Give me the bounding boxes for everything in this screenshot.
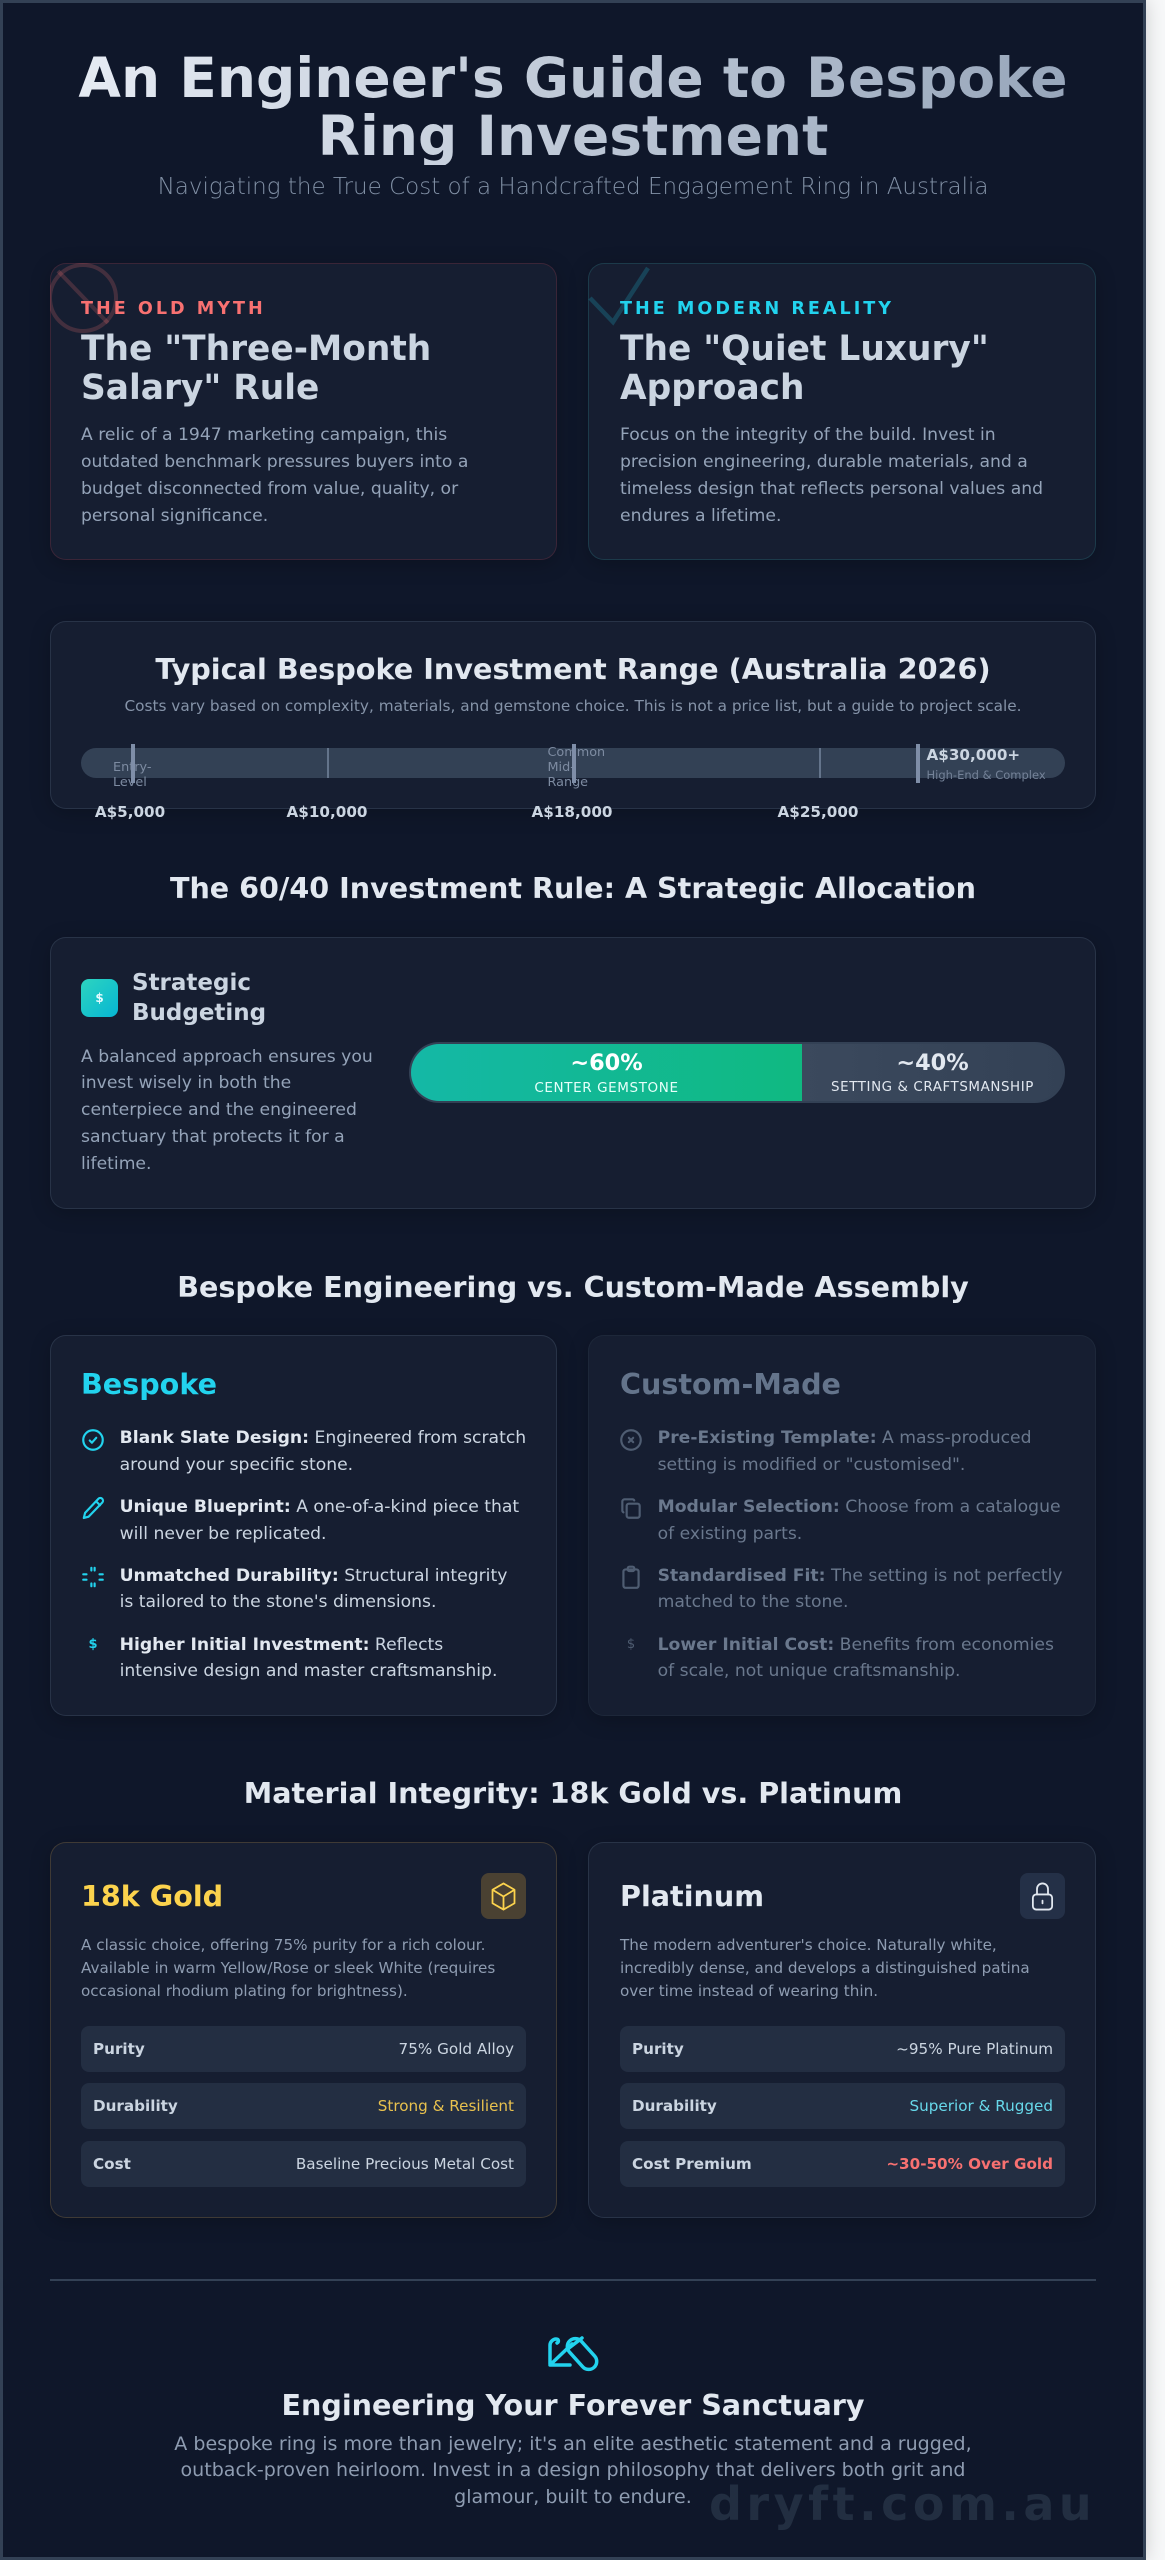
footer text: A bespoke ring is more than jewelry; it's an elite aesthetic statement and a rugged, bbox=[174, 2432, 972, 2454]
title: An Engineer's Guide to Bespoke bbox=[78, 46, 1068, 110]
value: ~60% bbox=[570, 1050, 643, 1076]
row: durability: Strong & Resilient bbox=[378, 2097, 514, 2115]
icon: padlock bbox=[1020, 1873, 1064, 1919]
icon: x circle bbox=[620, 1429, 642, 1451]
row: durability: Durability bbox=[93, 2097, 178, 2115]
heading bbox=[132, 970, 266, 1026]
item: cost: Lower Initial Cost: Benefits from economies bbox=[658, 1634, 1054, 1654]
row: cost bbox=[81, 2140, 526, 2186]
label: entry level bbox=[113, 760, 151, 790]
marker: 10k bbox=[327, 748, 329, 778]
body text: outdated benchmark pressures buyers into a bbox=[81, 452, 468, 472]
body text: A balanced approach ensures you bbox=[81, 1047, 373, 1067]
item: fit: Standardised Fit: The setting is not perfectly bbox=[658, 1566, 1063, 1586]
heading: material integrity: Material Integrity: 18k Gold vs. Platinum bbox=[244, 1776, 902, 1810]
item: durability bbox=[120, 1566, 507, 1612]
item: blank slate: around your specific stone. bbox=[120, 1455, 353, 1475]
row: durability bbox=[81, 2083, 526, 2129]
body text: budget disconnected from value, quality, or bbox=[81, 479, 458, 499]
heading: The "Quiet Luxury" bbox=[620, 328, 989, 368]
icon: prohibited sign bbox=[50, 263, 118, 333]
item: template: setting is modified or "customised". bbox=[658, 1455, 965, 1475]
item: modular bbox=[658, 1497, 1061, 1544]
heading: Platinum bbox=[620, 1878, 764, 1912]
label: THE MODERN REALITY bbox=[620, 299, 894, 319]
item: investment: intensive design and master craftsmanship. bbox=[120, 1661, 497, 1681]
icon: dollar badge: $ bbox=[95, 991, 104, 1005]
heading: Bespoke bbox=[81, 1366, 217, 1400]
body text bbox=[81, 425, 468, 526]
body text: timeless design that reflects personal values and bbox=[620, 479, 1043, 499]
marker: 30k bbox=[916, 744, 920, 783]
subtitle: Navigating the True Cost of a Handcrafted Engagement Ring in Australia bbox=[158, 174, 988, 200]
item: durability: is tailored to the stone's dimensions. bbox=[120, 1592, 436, 1612]
row: cost premium bbox=[620, 2140, 1065, 2186]
item: template bbox=[658, 1428, 1032, 1475]
panel: strategic budgeting bbox=[50, 937, 1096, 1209]
row: purity: ~95% Pure Platinum bbox=[896, 2040, 1053, 2058]
item: investment bbox=[120, 1634, 497, 1681]
heading: Strategic bbox=[132, 970, 251, 996]
icon: copy bbox=[621, 1498, 641, 1519]
footer text: glamour, built to endure. bbox=[454, 2486, 692, 2508]
row: purity bbox=[81, 2026, 526, 2072]
label: top tier price: A$30,000+ bbox=[926, 746, 1020, 764]
item: unique blueprint bbox=[120, 1497, 519, 1544]
title: Ring Investment bbox=[318, 104, 828, 168]
item: cost: of scale, not unique craftsmanship. bbox=[658, 1661, 961, 1681]
icon: cube bbox=[480, 1873, 526, 1919]
icon: pencil bbox=[82, 1496, 104, 1520]
panel: 18k gold bbox=[50, 1842, 557, 2218]
panel: platinum bbox=[588, 1842, 1096, 2218]
item: unique blueprint: Unique Blueprint: A one-of-a-kind piece that bbox=[120, 1497, 519, 1517]
row: purity: 75% Gold Alloy bbox=[399, 2040, 514, 2058]
row: durability: Durability bbox=[632, 2097, 717, 2115]
body text: endures a lifetime. bbox=[620, 506, 781, 526]
icon: dashed ring bbox=[82, 1566, 104, 1588]
heading: bespoke vs custom: Bespoke Engineering vs. Custom-Made Assembly bbox=[177, 1270, 969, 1304]
footer text: outback-proven heirloom. Invest in a design philosophy that delivers both grit and bbox=[181, 2459, 965, 2481]
body text: centerpiece and the engineered bbox=[81, 1100, 357, 1120]
item: template: Pre-Existing Template: A mass-produced bbox=[658, 1428, 1032, 1448]
marker: 25k bbox=[819, 748, 821, 778]
icon: check mark bbox=[588, 266, 650, 326]
row: purity: Purity bbox=[93, 2040, 145, 2058]
item: durability: Unmatched Durability: Structural integrity bbox=[120, 1566, 507, 1586]
panel: custom made bbox=[588, 1335, 1096, 1716]
label: common mid range: Common bbox=[548, 744, 605, 760]
label: common mid range: Mid- bbox=[548, 760, 575, 774]
row: purity: Purity bbox=[632, 2040, 684, 2058]
icon: check circle bbox=[82, 1429, 104, 1451]
description: occasional rhodium plating for brightness). bbox=[81, 1982, 408, 2000]
description: over time instead of wearing thin. bbox=[620, 1982, 878, 2000]
row: durability bbox=[620, 2083, 1065, 2129]
segment: setting and craftsmanship 40% bbox=[831, 1050, 1034, 1095]
label: SETTING & CRAFTSMANSHIP bbox=[831, 1080, 1034, 1095]
description: Available in warm Yellow/Rose or sleek White (requires bbox=[81, 1958, 495, 1976]
panel: the old myth bbox=[50, 263, 557, 560]
panel: bespoke bbox=[50, 1335, 557, 1716]
label: high end: High-End & Complex bbox=[926, 768, 1046, 782]
segment: center gemstone 60% bbox=[411, 1044, 802, 1101]
panel: the modern reality bbox=[588, 263, 1096, 560]
item: modular: of existing parts. bbox=[658, 1524, 802, 1544]
row: cost: Baseline Precious Metal Cost bbox=[296, 2154, 514, 2172]
body text: precision engineering, durable materials, and a bbox=[620, 452, 1028, 472]
item: fit: matched to the stone. bbox=[658, 1592, 848, 1612]
label: entry level: Level bbox=[113, 774, 147, 790]
description bbox=[81, 1936, 495, 2000]
footer text bbox=[174, 2432, 972, 2508]
description: incredibly dense, and develops a distinguished patina bbox=[620, 1958, 1030, 1976]
heading: Custom-Made bbox=[620, 1366, 841, 1400]
footer heading: Engineering Your Forever Sanctuary bbox=[282, 2388, 864, 2422]
body text: A relic of a 1947 marketing campaign, this bbox=[81, 425, 447, 445]
item: blank slate: Blank Slate Design: Engineered from scratch bbox=[120, 1428, 526, 1448]
panel: investment range bbox=[50, 621, 1096, 809]
icon: clipboard bbox=[622, 1566, 640, 1589]
icon: dollar badge bbox=[81, 979, 118, 1017]
item: cost bbox=[658, 1634, 1054, 1681]
price: 10,000: A$10,000 bbox=[287, 803, 367, 821]
body text: personal significance. bbox=[81, 506, 268, 526]
icon: footer mountain tool bbox=[548, 2336, 598, 2372]
marker: 5k bbox=[131, 744, 135, 783]
icon: dollar: $ bbox=[88, 1637, 98, 1652]
label: common mid range bbox=[548, 744, 605, 790]
description: The modern adventurer's choice. Naturally white, bbox=[620, 1936, 997, 1954]
label: entry level: Entry- bbox=[113, 760, 151, 774]
item: modular: Modular Selection: Choose from a catalogue bbox=[658, 1497, 1061, 1517]
item: fit bbox=[658, 1566, 1063, 1612]
label: common mid range: Range bbox=[548, 774, 588, 790]
description: Costs vary based on complexity, materials, and gemstone choice. This is not a price list, but a guide to project scale. bbox=[124, 697, 1022, 715]
price: 18,000: A$18,000 bbox=[532, 803, 612, 821]
label: CENTER GEMSTONE bbox=[534, 1080, 679, 1096]
icon: dollar: $ bbox=[627, 1637, 635, 1652]
range bar chart bbox=[81, 748, 1065, 778]
heading bbox=[620, 328, 989, 408]
allocation bar bbox=[409, 1042, 1065, 1103]
item: unique blueprint: will never be replicated. bbox=[120, 1524, 327, 1544]
value: ~40% bbox=[896, 1050, 969, 1076]
description: A classic choice, offering 75% purity for a rich colour. bbox=[81, 1936, 485, 1954]
item: investment: Higher Initial Investment: Reflects bbox=[120, 1634, 443, 1654]
heading bbox=[81, 328, 431, 408]
price: 5,000: A$5,000 bbox=[95, 803, 165, 821]
label: THE OLD MYTH bbox=[81, 299, 266, 319]
body text bbox=[81, 1047, 373, 1174]
row: durability: Superior & Rugged bbox=[909, 2097, 1053, 2115]
body text: sanctuary that protects it for a bbox=[81, 1127, 345, 1147]
watermark: dryft.com.au bbox=[709, 2477, 1096, 2531]
marker: 18k bbox=[572, 744, 576, 783]
item: blank slate bbox=[120, 1428, 526, 1475]
heading: Typical Bespoke Investment Range (Australia 2026) bbox=[155, 652, 991, 686]
heading: 18k Gold bbox=[81, 1878, 223, 1912]
heading: The "Three-Month bbox=[81, 328, 431, 368]
body text: Focus on the integrity of the build. Invest in bbox=[620, 425, 996, 445]
heading: 60/40 rule: The 60/40 Investment Rule: A Strategic Allocation bbox=[170, 871, 976, 905]
price: 25,000: A$25,000 bbox=[778, 803, 858, 821]
body text bbox=[620, 425, 1043, 526]
row: cost premium: Cost Premium bbox=[632, 2154, 752, 2172]
row: cost premium: ~30-50% Over Gold bbox=[886, 2154, 1053, 2172]
description bbox=[620, 1936, 1030, 2000]
heading: Budgeting bbox=[132, 1000, 266, 1026]
row: cost: Cost bbox=[93, 2154, 131, 2172]
body text: invest wisely in both the bbox=[81, 1073, 291, 1093]
row: purity bbox=[620, 2026, 1065, 2072]
heading: Approach bbox=[620, 368, 805, 408]
title bbox=[50, 48, 1096, 164]
heading: Salary" Rule bbox=[81, 368, 319, 408]
body text: lifetime. bbox=[81, 1154, 151, 1174]
